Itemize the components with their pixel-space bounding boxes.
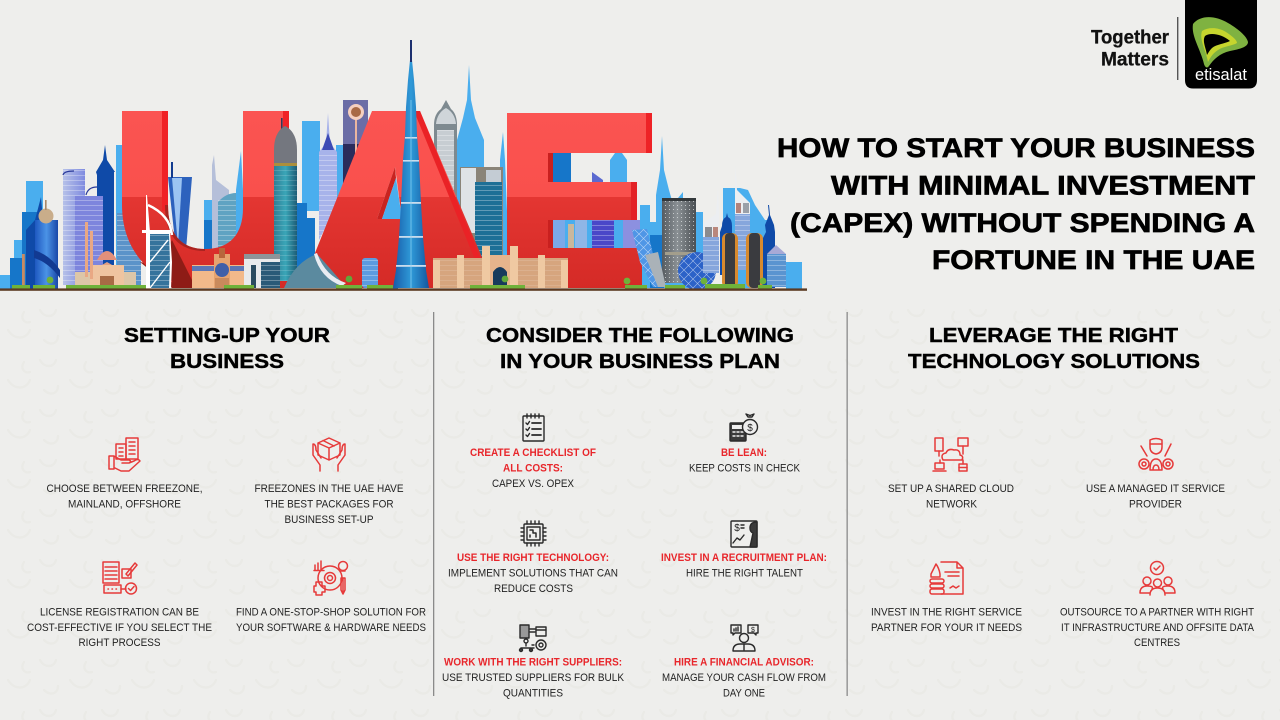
text: choose between: CHOOSE BETWEEN FREEZONE, (46, 483, 202, 495)
text: freezones: BUSINESS SET-UP (284, 514, 374, 526)
text: advisor (662, 656, 826, 700)
title: FORTUNE IN THE UAE (932, 245, 1255, 275)
text: checklist: ALL COSTS: (503, 462, 563, 474)
text: license registration: COST-EFFECTIVE IF YOU SELECT THE (27, 622, 212, 634)
icon: hand with buildings (109, 438, 140, 471)
logo: etisalat (1185, 0, 1257, 88)
letter A (313, 111, 495, 288)
icon: chip (521, 521, 546, 546)
icon: recruitment: $ (734, 523, 740, 534)
text: technology (448, 552, 618, 595)
letter U (122, 111, 289, 288)
title: HOW TO START YOUR BUSINESS (777, 133, 1255, 163)
icon: invest in service partner (930, 562, 963, 594)
dome with white crescent (284, 253, 362, 288)
teal tower with silver cap (274, 118, 297, 281)
icon: suppliers (520, 625, 546, 652)
heading: business plan: IN YOUR BUSINESS PLAN (500, 351, 780, 373)
heading: business plan: CONSIDER THE FOLLOWING (486, 325, 794, 347)
text: outsource: IT INFRASTRUCTURE AND OFFSITE DATA (1061, 622, 1255, 634)
burj al arab (142, 195, 172, 289)
capital gate leaning tower (632, 229, 666, 287)
text: managed it (1086, 483, 1225, 510)
text: checklist: CREATE A CHECKLIST OF (470, 447, 596, 459)
divider lines (433, 312, 434, 696)
round tower and minaret left (22, 200, 60, 289)
white towers right (703, 165, 750, 273)
text: freezones: FREEZONES IN THE UAE HAVE (254, 483, 404, 495)
text: license registration: LICENSE REGISTRATION CAN BE (40, 606, 199, 618)
logo: together matters slogan (1091, 28, 1170, 70)
icon: outsource team (1140, 562, 1175, 595)
title (777, 133, 1256, 275)
small silo (767, 245, 786, 287)
dark cylinders (722, 233, 763, 288)
text: advisor: MANAGE YOUR CASH FLOW FROM (662, 672, 826, 684)
text: service partner: INVEST IN THE RIGHT SERVICE (871, 606, 1022, 618)
logo: together matters slogan: Matters (1101, 50, 1169, 70)
text: technology: IMPLEMENT SOLUTIONS THAT CAN (448, 568, 618, 580)
icon: license form (103, 562, 137, 594)
text: one-stop-shop: YOUR SOFTWARE & HARDWARE NEEDS (236, 622, 426, 634)
icon: one-stop-shop gears (314, 561, 348, 595)
text: license registration: RIGHT PROCESS (78, 637, 160, 649)
heading: technology: LEVERAGE THE RIGHT (929, 325, 1178, 347)
heading: setting-up (124, 325, 331, 373)
mosque (66, 222, 146, 289)
text: service partner: PARTNER FOR YOUR IT NEEDS (871, 622, 1022, 634)
text: technology: USE THE RIGHT TECHNOLOGY: (457, 552, 609, 564)
text: suppliers: QUANTITIES (503, 688, 563, 700)
atlantis hotel (433, 246, 568, 288)
text: cloud: NETWORK (926, 498, 978, 510)
text: checklist (470, 447, 596, 490)
dark office block (244, 254, 280, 288)
grey cylinder tower (662, 198, 696, 283)
heading: technology (908, 325, 1200, 373)
text: freezones (254, 483, 404, 526)
icon: recruitment (731, 521, 757, 547)
text: choose between (46, 483, 202, 510)
ground line (0, 288, 807, 291)
title: WITH MINIMAL INVESTMENT (831, 170, 1256, 200)
text: managed it: USE A MANAGED IT SERVICE (1086, 483, 1225, 495)
small tower (362, 258, 393, 288)
text: technology: REDUCE COSTS (494, 583, 573, 595)
panel: business plan (442, 325, 827, 700)
logo: etisalat: etisalat (1195, 65, 1247, 84)
text: be lean: KEEP COSTS IN CHECK (689, 462, 801, 474)
text: one-stop-shop: FIND A ONE-STOP-SHOP SOLUTION FOR (236, 606, 426, 618)
text: suppliers: WORK WITH THE RIGHT SUPPLIERS: (444, 656, 622, 668)
burj khalifa (393, 40, 429, 288)
icon: managed IT engineer (1139, 438, 1173, 470)
text: choose between: MAINLAND, OFFSHORE (68, 498, 181, 510)
text: freezones: THE BEST PACKAGES FOR (264, 498, 394, 510)
text: cloud: SET UP A SHARED CLOUD (888, 483, 1014, 495)
text: recruitment: INVEST IN A RECRUITMENT PLAN: (661, 552, 827, 564)
text: suppliers (442, 656, 625, 700)
sharjah building (192, 248, 252, 288)
illustration: UAE letters and city skyline (0, 40, 807, 291)
text: managed it: PROVIDER (1129, 498, 1182, 510)
text: cloud (888, 483, 1014, 510)
icon: shared cloud network (933, 438, 968, 471)
heading: business plan (486, 325, 794, 373)
text: license registration (27, 606, 212, 649)
panel: setting-up your business (27, 325, 426, 649)
globe building (678, 252, 716, 290)
text: recruitment (661, 552, 827, 580)
letter shadows (140, 200, 640, 288)
heading: technology: TECHNOLOGY SOLUTIONS (908, 351, 1200, 373)
icon: hands holding box (313, 438, 345, 471)
icon: checklist (523, 414, 544, 441)
ground greenery (12, 277, 772, 289)
heading: setting-up: BUSINESS (170, 351, 284, 373)
logo: together matters slogan: Together (1091, 28, 1170, 48)
text: be lean: BE LEAN: (721, 447, 767, 459)
text: outsource (1060, 606, 1255, 649)
text: checklist: CAPEX VS. OPEX (492, 478, 575, 490)
text: service partner (871, 606, 1022, 634)
icon: calculator and money (730, 414, 758, 441)
letter E (507, 113, 652, 288)
title: (CAPEX) WITHOUT SPENDING A (790, 208, 1255, 238)
text: be lean (689, 447, 801, 474)
icon: advisor: $ (751, 627, 755, 634)
back skyline silhouettes (0, 65, 802, 290)
text: outsource: OUTSOURCE TO A PARTNER WITH RIGHT (1060, 606, 1254, 618)
heading: setting-up: SETTING-UP YOUR (124, 325, 331, 347)
text: outsource: CENTRES (1134, 637, 1180, 649)
icon: advisor (731, 625, 758, 651)
text: advisor: DAY ONE (723, 688, 765, 700)
text: suppliers: USE TRUSTED SUPPLIERS FOR BULK (442, 672, 625, 684)
icon: calculator and money: $ (747, 423, 753, 434)
buildings behind letters (63, 100, 640, 286)
text: one-stop-shop (236, 606, 426, 634)
text: advisor: HIRE A FINANCIAL ADVISOR: (674, 656, 814, 668)
panel: technology solutions (871, 325, 1255, 649)
text: recruitment: HIRE THE RIGHT TALENT (686, 568, 803, 580)
